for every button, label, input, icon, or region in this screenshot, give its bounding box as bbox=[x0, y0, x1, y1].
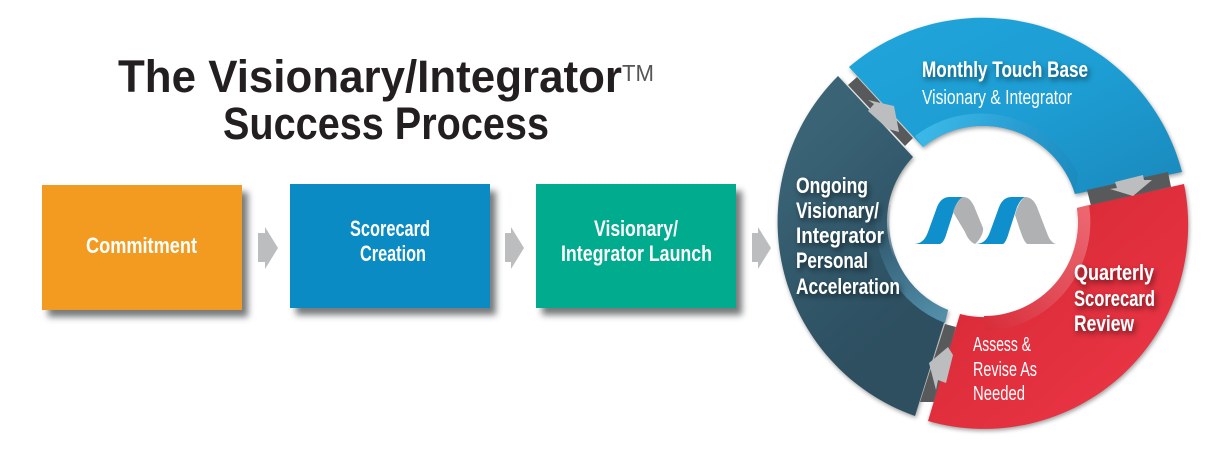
step: Scorecard Creation: Creation bbox=[360, 241, 426, 266]
cycle diagram bbox=[778, 18, 1189, 431]
arrow: launch to cycle bbox=[752, 227, 771, 269]
segment: Monthly Touch Base bbox=[849, 18, 1183, 196]
segment: Quarterly Scorecard Review: Review bbox=[1074, 311, 1135, 336]
segment: Quarterly Scorecard Review: Scorecard bbox=[1074, 286, 1155, 311]
segment: Ongoing Personal Acceleration: Visionary/ bbox=[796, 198, 879, 223]
segment: Quarterly Scorecard Review: Needed bbox=[973, 383, 1025, 405]
title: Success Process bbox=[223, 98, 549, 149]
arrow: dark to blue bbox=[868, 100, 899, 132]
segment: Monthly Touch Base: Visionary & Integrator bbox=[922, 87, 1072, 109]
segment: Monthly Touch Base: Monthly Touch Base bbox=[922, 57, 1088, 82]
step: Commitment bbox=[42, 185, 248, 317]
connector: blue to red bbox=[1087, 172, 1171, 206]
arrow: blue to red bbox=[1110, 175, 1152, 196]
arrow: red to dark bbox=[929, 347, 953, 390]
title: The Visionary/Integrator bbox=[118, 51, 622, 102]
segment: Ongoing Personal Acceleration bbox=[778, 76, 949, 418]
step: Visionary/Integrator Launch: Integrator Launch bbox=[561, 241, 712, 266]
segment: Quarterly Scorecard Review bbox=[928, 184, 1189, 431]
arrow: scorecard to launch bbox=[505, 227, 524, 269]
segment: Ongoing Personal Acceleration: Ongoing bbox=[796, 173, 868, 198]
logo bbox=[913, 197, 1056, 244]
step: Visionary/Integrator Launch bbox=[536, 184, 742, 315]
segment: Ongoing Personal Acceleration: Acceleration bbox=[796, 274, 900, 299]
segment: Quarterly Scorecard Review: Assess & bbox=[973, 334, 1031, 356]
segment: Quarterly Scorecard Review: Revise As bbox=[973, 359, 1037, 381]
segment: Ongoing Personal Acceleration: Integrator bbox=[796, 223, 884, 248]
trademark mark: TM bbox=[622, 60, 654, 86]
title bbox=[118, 51, 654, 149]
step: Visionary/Integrator Launch: Visionary/ bbox=[594, 216, 678, 241]
segment: Ongoing Personal Acceleration: Personal bbox=[796, 248, 868, 273]
step: Scorecard Creation bbox=[290, 184, 496, 315]
arrow: commitment to scorecard bbox=[258, 227, 278, 269]
segment: Quarterly Scorecard Review: Quarterly bbox=[1074, 260, 1155, 285]
connector: dark to blue bbox=[848, 77, 913, 146]
step: Commitment: Commitment bbox=[86, 233, 198, 258]
step: Scorecard Creation: Scorecard bbox=[350, 216, 430, 241]
connector: red to dark bbox=[920, 324, 956, 402]
